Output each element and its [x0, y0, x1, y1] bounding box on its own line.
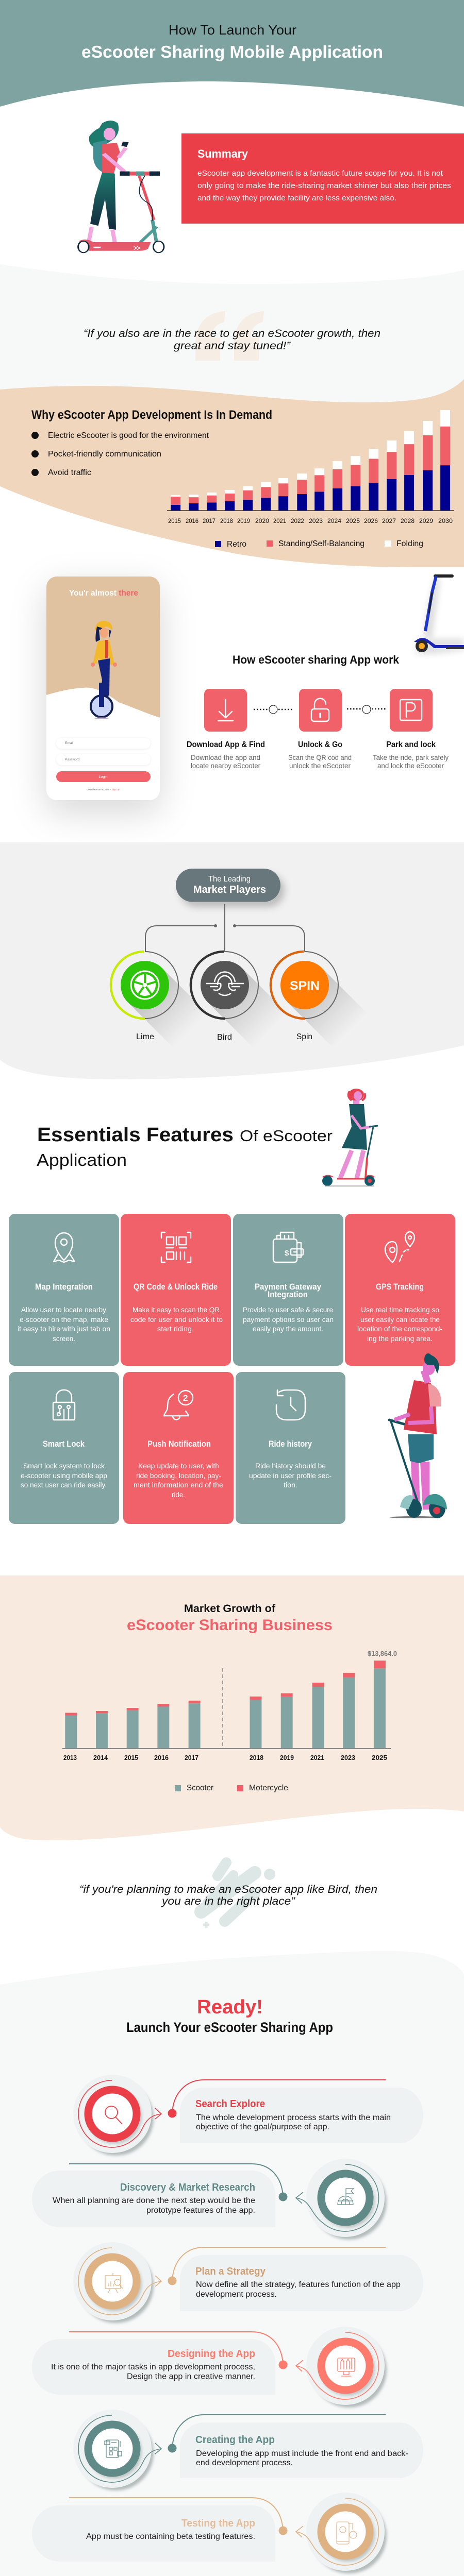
card: payment gateway: easily pay the amount. — [253, 1325, 323, 1333]
card: push notification — [123, 1372, 234, 1524]
bullet list: Electric eScooter is good for the environment — [48, 431, 209, 440]
heading: essential features — [37, 1124, 333, 1170]
step 3: plan a strategy: development process. — [196, 2290, 277, 2299]
market players pill — [176, 869, 280, 902]
chart years: 2018 — [220, 517, 233, 524]
bar chart — [62, 1650, 397, 1792]
bullet list: Pocket-friendly communication — [48, 450, 161, 459]
card: map integration: e-scooter on the map, make — [20, 1315, 108, 1324]
growth chart years — [63, 1754, 387, 1761]
illustration: woman on red scooter — [78, 121, 164, 252]
logo: lime — [111, 952, 208, 1048]
step 1: search explore — [73, 2075, 423, 2156]
chart years: 2030 — [438, 517, 453, 524]
card: qr code: code for user and unlock it to — [130, 1315, 223, 1324]
chart legend: Folding — [396, 539, 423, 548]
icon: history clock — [276, 1390, 305, 1420]
card: gps tracking: user easily can locate the — [360, 1315, 440, 1324]
bullet list: Avoid traffic — [48, 468, 91, 477]
illustration: blue scooter — [412, 576, 464, 654]
step: download: locate nearby eScooter — [191, 762, 260, 770]
card: map integration — [9, 1214, 119, 1366]
card: push notification: ment information end of the — [134, 1481, 223, 1489]
card: payment gateway: $ — [285, 1249, 289, 1258]
card: push notification: Keep update to user, with — [138, 1462, 219, 1470]
logo: spin: SPIN — [290, 979, 320, 993]
icon: presentation board — [105, 2273, 123, 2293]
title line 2: eScooter Sharing Mobile Application — [81, 42, 383, 61]
step 3: plan a strategy: Now define all the strategy, features function of the app — [196, 2280, 401, 2289]
card: push notification: 2 — [183, 1393, 188, 1403]
chart years: 2022 — [291, 517, 304, 524]
connectors — [145, 904, 305, 952]
card: gps tracking — [345, 1214, 455, 1366]
icon: gps pins — [385, 1232, 415, 1262]
step 1: search explore: Search Explore — [195, 2098, 265, 2110]
icon: app grid — [105, 2440, 122, 2458]
market growth heading: Market Growth of — [184, 1603, 276, 1615]
phone heading: You'r almost there — [69, 589, 138, 598]
icon: qr code — [161, 1232, 191, 1262]
step: park: Park and lock — [386, 740, 436, 749]
step: park — [373, 689, 449, 770]
illustration: girl on scooter — [322, 1089, 378, 1186]
panel: market growth — [0, 1575, 464, 1840]
card: ride history: update in user profile sec- — [249, 1471, 332, 1480]
quote 2: “if you're planning to make an eScooter app like Bird, then — [79, 1884, 377, 1895]
card: map integration: screen. — [53, 1334, 75, 1343]
summary body: only going to make the ride-sharing market shinier but also their prices — [197, 181, 451, 190]
player labels: Bird — [217, 1033, 232, 1042]
step: park: Take the ride, park safely — [373, 754, 449, 761]
heading: essential features: Of eScooter — [240, 1127, 333, 1145]
growth chart legend — [175, 1784, 288, 1792]
step 5: creating the app — [73, 2410, 423, 2490]
heading: essential features: Essentials Features — [37, 1124, 234, 1146]
step 4: designing the app: It is one of the major tasks in app development process, — [51, 2363, 255, 2371]
growth chart legend: Scooter — [187, 1784, 214, 1792]
icon: phone gears — [337, 2522, 357, 2544]
player labels: Lime — [136, 1032, 154, 1041]
heading: ready: Ready! — [197, 1996, 263, 2018]
card: smart lock: so next user can ride easily. — [21, 1481, 107, 1489]
summary heading: Summary — [197, 147, 248, 160]
chart years: 2026 — [364, 517, 378, 524]
growth chart years: 2018 — [250, 1754, 263, 1761]
step 4: designing the app: Design the app in creative manner. — [127, 2372, 255, 2381]
icon: smart lock — [53, 1390, 75, 1420]
chart years: 2019 — [237, 517, 250, 524]
card: gps tracking: location of the correspond- — [357, 1325, 442, 1333]
heading: essential features: Application — [37, 1150, 127, 1170]
card: push notification: Push Notification — [147, 1439, 211, 1449]
step 4: designing the app — [32, 2327, 387, 2408]
step 2: discovery — [32, 2159, 387, 2240]
card: ride history: Ride history should be — [255, 1462, 326, 1470]
quote 1 — [84, 328, 380, 352]
growth chart years: 2016 — [154, 1754, 169, 1761]
card: payment gateway: Payment Gateway — [255, 1282, 321, 1292]
player labels: Spin — [296, 1032, 312, 1041]
panel: why demand — [0, 379, 464, 567]
login form — [56, 738, 151, 791]
card: ride history: Ride history — [269, 1439, 312, 1449]
chart legend: Standing/Self-Balancing — [278, 539, 364, 548]
logo: spin — [271, 952, 368, 1048]
icon: globe flag — [338, 2189, 354, 2205]
summary body — [197, 169, 451, 202]
card: gps tracking: ing the parking area. — [367, 1334, 433, 1343]
connector 2 — [347, 705, 386, 714]
chart years: 2029 — [419, 517, 433, 524]
panel: summary — [181, 133, 464, 224]
step: download: Download the app and — [191, 754, 260, 761]
heading: ready — [126, 1996, 333, 2035]
bar chart: $13,864.0 — [368, 1650, 397, 1657]
card: smart lock: e-scooter using mobile app — [21, 1471, 107, 1480]
card: map integration: Allow user to locate nearby — [21, 1306, 106, 1314]
card: ride history: tion. — [284, 1481, 297, 1489]
panel: launch steps — [0, 1951, 464, 2576]
step: unlock — [288, 689, 352, 770]
growth chart years: 2019 — [280, 1754, 294, 1761]
icon: bell — [164, 1391, 193, 1420]
step 1: search explore: objective of the goal/purpose of app. — [196, 2123, 329, 2131]
card: map integration: it easy to hire with just tab on — [18, 1325, 110, 1333]
chart years: 2024 — [327, 517, 341, 524]
chart years: 2015 — [168, 517, 181, 524]
card: qr code: start riding. — [157, 1325, 194, 1333]
growth chart years: 2017 — [185, 1754, 198, 1761]
card: push notification: ride booking, location, pay- — [136, 1471, 221, 1480]
card: qr code: Make it easy to scan the QR — [132, 1306, 220, 1314]
chart years: 2017 — [203, 517, 216, 524]
icon: wallet — [273, 1232, 303, 1262]
icon: design monitor — [338, 2358, 355, 2376]
card: qr code: QR Code & Unlock Ride — [134, 1282, 218, 1292]
step 2: discovery: Discovery & Market Research — [120, 2182, 255, 2193]
icon: map pin — [54, 1233, 75, 1262]
card: qr code — [121, 1214, 231, 1366]
logo: bird — [191, 952, 288, 1048]
step 3: plan a strategy: Plan a Strategy — [195, 2266, 266, 2277]
step 4: designing the app: Designing the App — [168, 2348, 255, 2360]
decoration behind quote 2 — [201, 1862, 275, 1928]
step: park: and lock the eScooter — [377, 762, 444, 770]
summary body: eScooter app development is a fantastic future scope for you. It is not — [197, 169, 443, 178]
growth chart years: 2013 — [63, 1754, 77, 1761]
card: map integration: Map Integration — [35, 1282, 93, 1292]
card: smart lock — [9, 1372, 119, 1524]
bullet list — [31, 431, 209, 477]
card: gps tracking: GPS Tracking — [376, 1282, 424, 1292]
growth chart years: 2021 — [310, 1754, 324, 1761]
chart legend — [215, 539, 423, 549]
step 6: testing the app — [32, 2493, 387, 2573]
icon: unlock — [311, 699, 329, 721]
heading: ready: Launch Your eScooter Sharing App — [126, 2020, 333, 2035]
growth chart years: 2023 — [341, 1754, 355, 1761]
growth chart years: 2025 — [372, 1754, 387, 1761]
chart years: 2028 — [401, 517, 415, 524]
market players pill: Market Players — [193, 884, 266, 895]
card: payment gateway: Provide to user safe & secure — [243, 1306, 333, 1314]
step: unlock: Scan the QR cod and — [288, 754, 352, 761]
step 6: testing the app: Testing the App — [181, 2518, 255, 2529]
step 2: discovery: When all planning are done the next step would be the — [53, 2196, 255, 2205]
step 5: creating the app: Developing the app must include the front end and back- — [196, 2449, 408, 2458]
market growth heading: eScooter Sharing Business — [127, 1617, 333, 1634]
chart years: 2027 — [382, 517, 396, 524]
card: smart lock: Smart lock system to lock — [23, 1462, 105, 1470]
chart years: 2020 — [255, 517, 269, 524]
market growth heading — [127, 1603, 333, 1634]
market players pill: The Leading — [208, 875, 251, 884]
step: unlock: unlock the eScooter — [289, 762, 351, 770]
stacked bar chart — [167, 410, 454, 549]
quote 2: you are in the right place” — [161, 1895, 295, 1907]
login form: Password — [65, 758, 80, 761]
growth chart years: 2015 — [124, 1754, 138, 1761]
card: payment gateway: Integration — [268, 1290, 308, 1299]
growth chart legend: Motercycle — [249, 1784, 288, 1792]
step 5: creating the app: end development process. — [196, 2459, 293, 2467]
icon: magnifier — [105, 2106, 122, 2124]
chart years: 2021 — [273, 517, 286, 524]
icon: quotation mark — [195, 311, 264, 361]
chart years: 2016 — [186, 517, 198, 524]
heading: how app works: How eScooter sharing App work — [233, 653, 400, 666]
step 6: testing the app: App must be containing beta testing features. — [86, 2532, 255, 2541]
login form: Don't have an account? Sign Up — [87, 788, 120, 791]
card: push notification: ride. — [172, 1490, 185, 1499]
step: download — [187, 689, 265, 770]
chart years: 2023 — [309, 517, 323, 524]
card: smart lock: Smart Lock — [43, 1439, 85, 1449]
panel: market players — [0, 842, 464, 1079]
illustration: woman on unicycle — [91, 621, 117, 719]
illustration: man on segway — [389, 1353, 447, 1518]
quote 1: “If you also are in the race to get an eScooter growth, then — [84, 328, 380, 340]
summary body: and the way they provide facility are less expensive also. — [197, 194, 396, 202]
card: payment gateway: payment options so user can — [243, 1315, 334, 1324]
step: download: Download App & Find — [187, 740, 265, 749]
heading: why in demand: Why eScooter App Development Is In Demand — [31, 408, 272, 422]
quote 2 — [79, 1884, 377, 1907]
icon: download — [218, 700, 233, 721]
login form: Login — [98, 775, 108, 779]
step 5: creating the app: Creating the App — [195, 2434, 275, 2446]
card: gps tracking: Use real time tracking so — [361, 1306, 439, 1314]
title line 1: How To Launch Your — [169, 22, 296, 38]
icon: parking — [400, 700, 422, 720]
login form: Email — [65, 741, 74, 745]
card: ride history — [236, 1372, 345, 1524]
header banner — [0, 0, 464, 107]
step 3: plan a strategy — [73, 2242, 423, 2323]
player labels — [136, 1032, 312, 1042]
chart years: 2025 — [346, 517, 360, 524]
chart years — [168, 517, 453, 524]
growth chart years: 2014 — [93, 1754, 108, 1761]
chart legend: Retro — [227, 540, 246, 549]
step 2: discovery: prototype features of the app. — [146, 2206, 255, 2215]
phone mockup — [46, 577, 160, 800]
step: unlock: Unlock & Go — [298, 740, 342, 749]
card: payment gateway — [233, 1214, 343, 1366]
step 1: search explore: The whole development process starts with the main — [196, 2113, 391, 2122]
quote band background — [0, 264, 464, 412]
connector 1 — [254, 705, 293, 714]
quote 1: great and stay tuned!” — [174, 340, 291, 352]
